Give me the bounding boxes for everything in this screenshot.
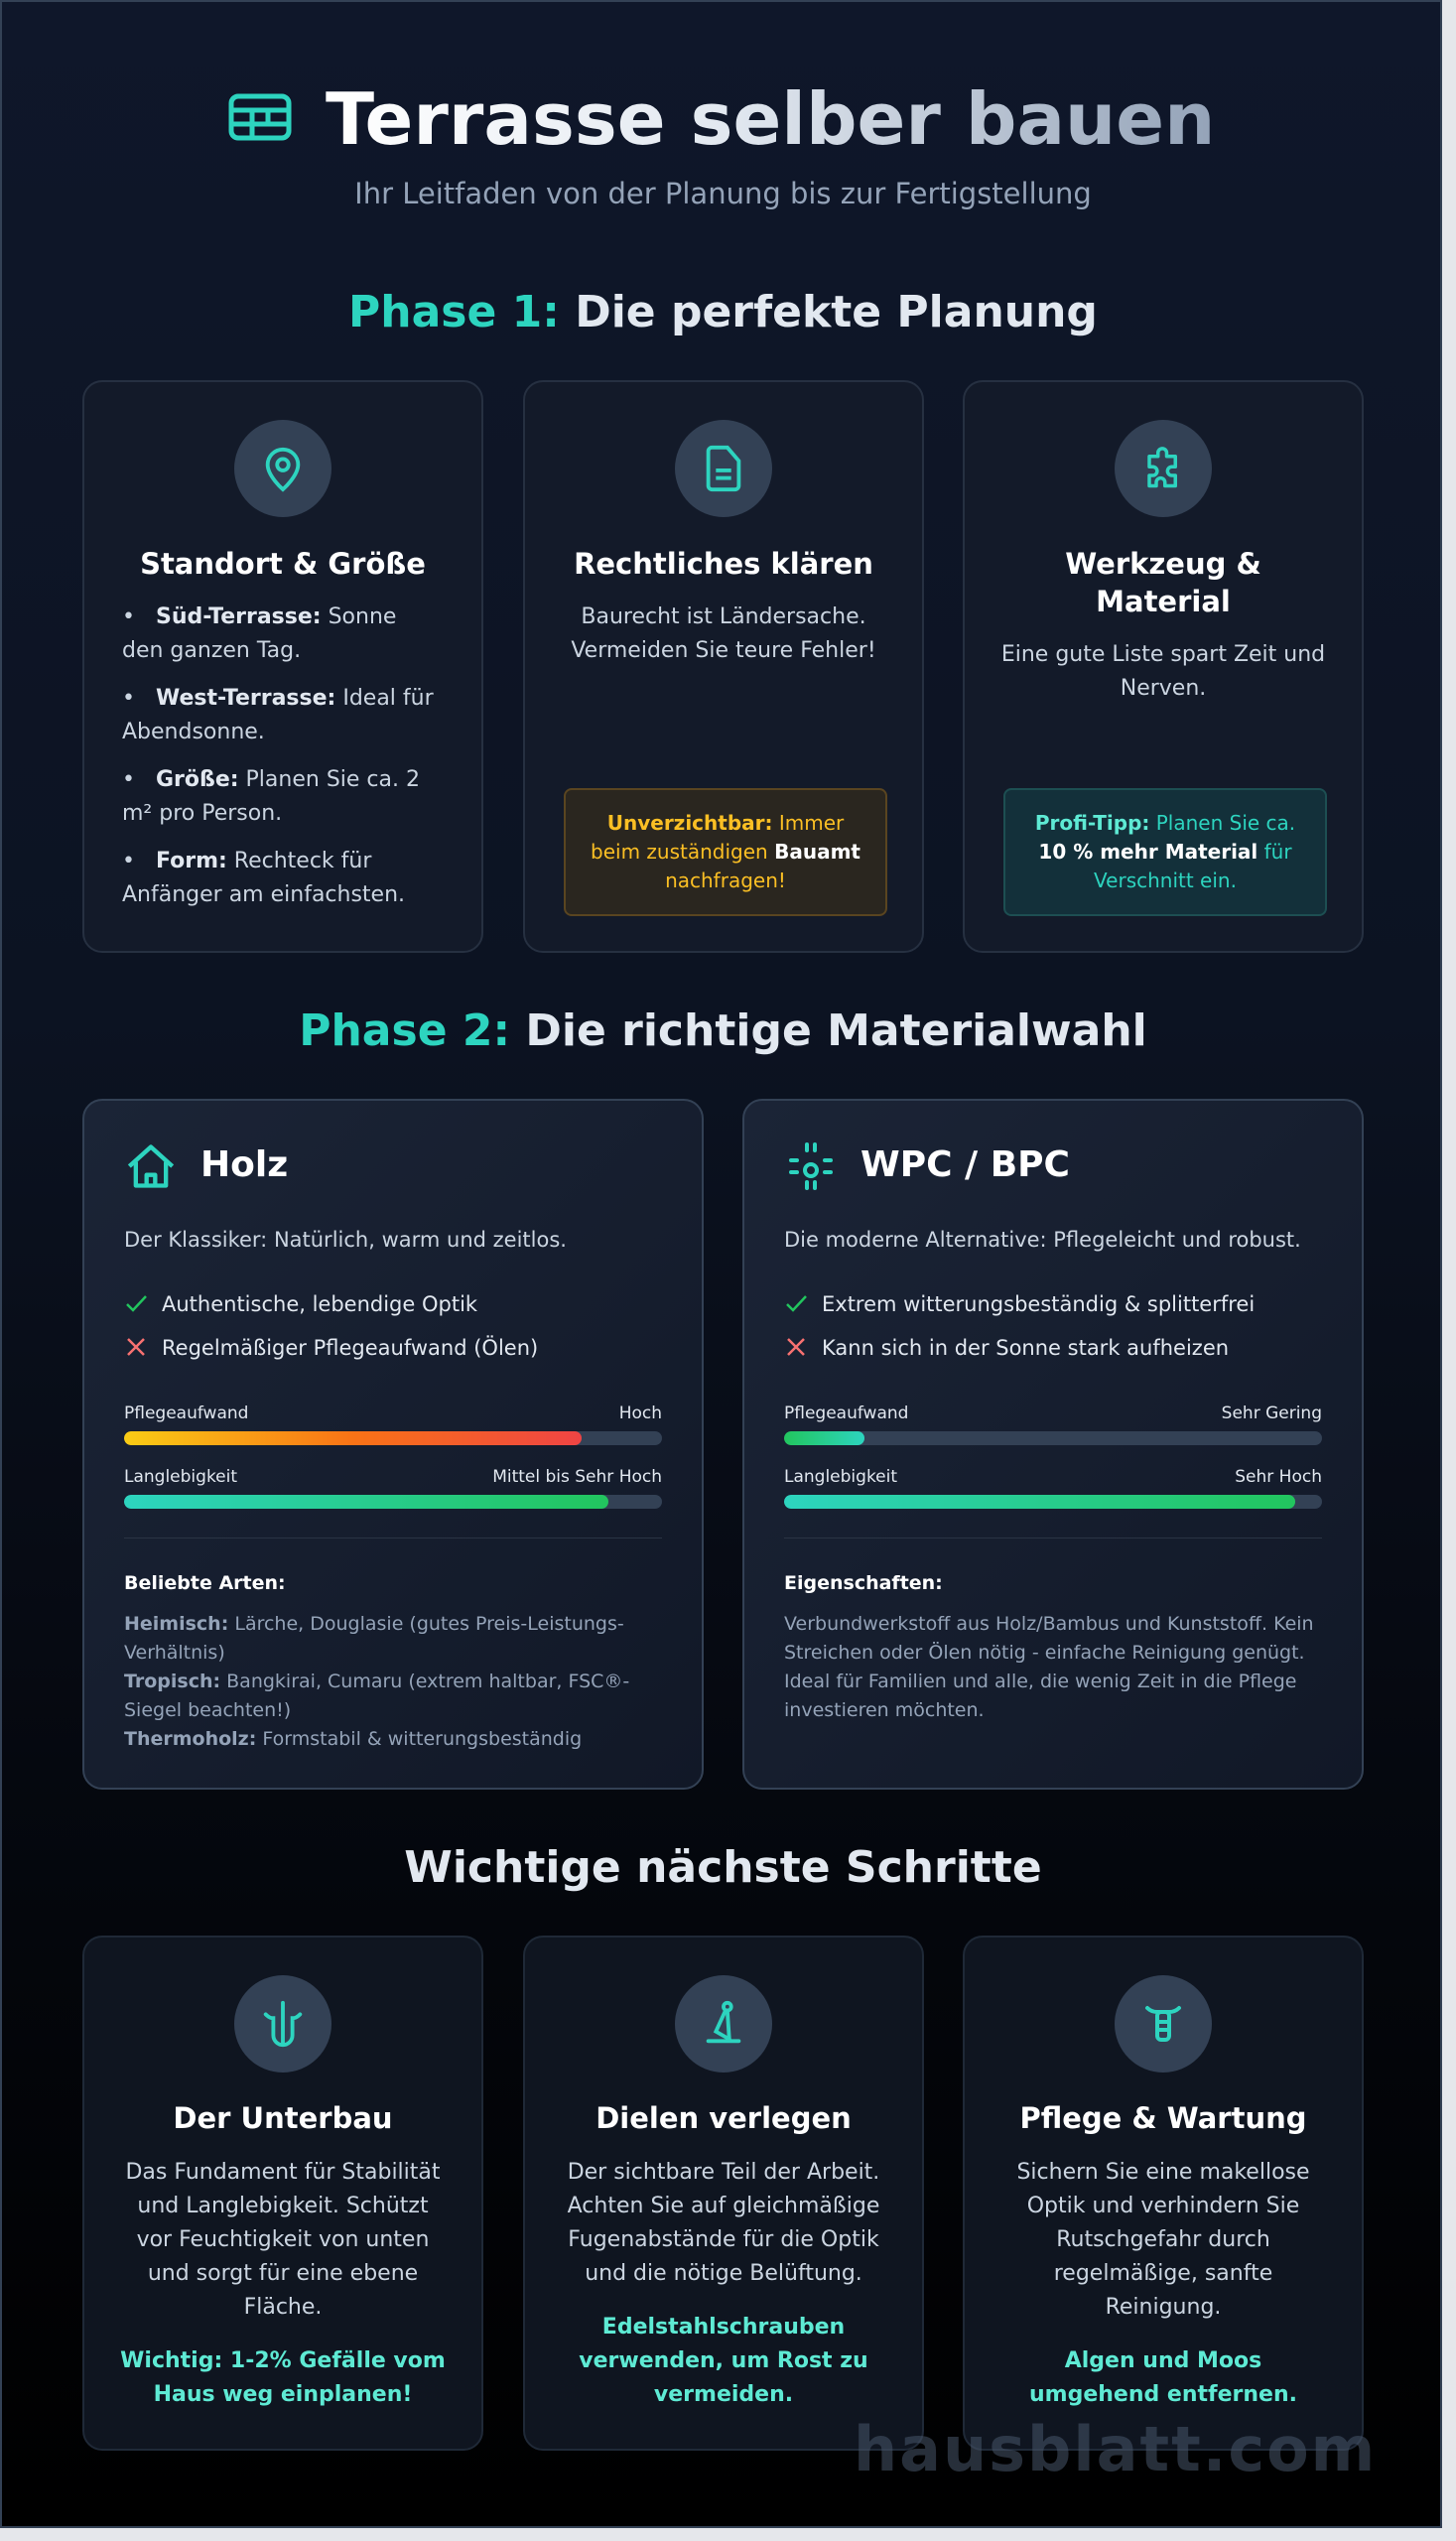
bar: Langlebigkeit: Sehr Hoch [1235, 1467, 1322, 1487]
bullet list: • Größe: Planen Sie ca. 2 m² pro Person. [122, 767, 420, 826]
text: Das Fundament für Stabilität und Langlebigkeit. Schützt vor Feuchtigkeit von unten und sorgt für eine ebene Fläche. [125, 2160, 441, 2320]
bar: Pflegeaufwand: Sehr Gering [1222, 1404, 1322, 1423]
bullet list [122, 604, 434, 907]
bar: Pflegeaufwand: Pflegeaufwand [784, 1404, 908, 1423]
card title: Rechtliches klären [574, 547, 873, 581]
bullet list: • Süd-Terrasse: Sonne den ganzen Tag. [122, 604, 396, 663]
heading: next steps: Wichtige nächste Schritte [404, 1842, 1042, 1893]
bar: Pflegeaufwand [784, 1404, 1322, 1423]
text: Eine gute Liste spart Zeit und Nerven. [1001, 642, 1325, 701]
icon: terrace grid [228, 93, 292, 141]
card title: Dielen verlegen [596, 2101, 852, 2135]
text: Sichern Sie eine makellose Optik und verhindern Sie Rutschgefahr durch regelmäßige, sanfte Reinigung. [1016, 2160, 1310, 2320]
text block: types: Beliebte Arten: [124, 1572, 286, 1594]
text block: types: Heimisch: Lärche, Douglasie (gutes Preis-Leistungs-Verhältnis) [124, 1613, 624, 1664]
callout: tip: Profi-Tipp: Planen Sie ca. 10 % mehr Material für Verschnitt ein. [1035, 811, 1295, 892]
panel: Dielen verlegen [523, 1936, 924, 2451]
panel: WPC / BPC [742, 1099, 1364, 1790]
heading: phase 1: Phase 1: Die perfekte Planung [348, 287, 1098, 337]
icon: puzzle [1115, 420, 1212, 517]
panel: Werkzeug & Material [963, 380, 1364, 953]
header [228, 77, 1215, 210]
pro con list: Kann sich in der Sonne stark aufheizen [822, 1336, 1229, 1360]
text block: types: Tropisch: Bangkirai, Cumaru (extrem haltbar, FSC®-Siegel beachten!) [124, 1671, 629, 1721]
icon: location pin [234, 420, 331, 517]
bar: Langlebigkeit: Langlebigkeit [124, 1467, 237, 1487]
icon: tool [675, 1975, 772, 2073]
card title: Der Unterbau [173, 2101, 393, 2135]
icon: house [128, 1144, 174, 1188]
bar: Langlebigkeit [784, 1467, 1322, 1487]
card title: Material [1096, 585, 1231, 618]
bar: Pflegeaufwand [124, 1404, 662, 1423]
card title [1065, 547, 1261, 618]
panel: Standort & Größe [82, 380, 483, 953]
material title: WPC / BPC [860, 1144, 1070, 1185]
pro con list [126, 1292, 538, 1360]
title: Terrasse selber bauen [326, 77, 1215, 161]
bar: Langlebigkeit: Langlebigkeit [784, 1467, 897, 1487]
callout text: Wichtig: 1-2% Gefälle vom Haus weg einplanen! [120, 2348, 446, 2407]
callout: warning [564, 788, 887, 916]
bullet list: • Form: Rechteck für Anfänger am einfachsten. [122, 849, 405, 907]
pro con list: Regelmäßiger Pflegeaufwand (Ölen) [162, 1336, 538, 1360]
bar: Pflegeaufwand: Pflegeaufwand [124, 1404, 248, 1423]
panel: Holz [82, 1099, 704, 1790]
subtitle: Ihr Leitfaden von der Planung bis zur Fertigstellung [354, 177, 1092, 210]
bar: Langlebigkeit [124, 1467, 662, 1487]
card title: Standort & Größe [140, 547, 426, 581]
text: Baurecht ist Ländersache. Vermeiden Sie teure Fehler! [571, 604, 876, 663]
watermark: hausblatt.com [854, 2413, 1377, 2485]
icon: foundation [234, 1975, 331, 2073]
callout: warning: Unverzichtbar: Immer beim zuständigen Bauamt nachfragen! [591, 811, 860, 892]
panel: Der Unterbau [82, 1936, 483, 2451]
callout text: Algen und Moos umgehend entfernen. [1029, 2348, 1297, 2407]
panel: Pflege & Wartung [963, 1936, 1364, 2451]
text block: types: Thermoholz: Formstabil & witterungsbeständig [124, 1728, 582, 1750]
text block: properties: Eigenschaften: [784, 1572, 943, 1594]
text block: properties: Verbundwerkstoff aus Holz/Bambus und Kunststoff. Kein Streichen oder Ölen nötig - einfache Reinigung genügt. Ideal für Familien und alle, die wenig Zeit in die Pflege investieren möchten. [784, 1613, 1314, 1721]
bar: Langlebigkeit: Mittel bis Sehr Hoch [492, 1467, 662, 1487]
heading: phase 2: Phase 2: Die richtige Materialwahl [299, 1005, 1147, 1056]
callout text: Edelstahlschrauben verwenden, um Rost zu vermeiden. [579, 2315, 868, 2407]
description: Die moderne Alternative: Pflegeleicht und robust. [784, 1228, 1301, 1252]
material title: Holz [200, 1144, 288, 1185]
icon: cleaning [1115, 1975, 1212, 2073]
pro con list [786, 1292, 1255, 1360]
bullet list: • West-Terrasse: Ideal für Abendsonne. [122, 686, 434, 744]
bar: Pflegeaufwand: Hoch [619, 1404, 662, 1423]
description: Der Klassiker: Natürlich, warm und zeitlos. [124, 1228, 567, 1252]
icon: composite [789, 1142, 833, 1190]
panel: Rechtliches klären [523, 380, 924, 953]
callout: tip [1003, 788, 1327, 916]
icon: document [675, 420, 772, 517]
card title: Werkzeug & [1065, 547, 1261, 581]
text block: types [124, 1572, 629, 1750]
text: Der sichtbare Teil der Arbeit. Achten Sie auf gleichmäßige Fugenabstände für die Optik und die nötige Belüftung. [568, 2160, 879, 2286]
card title: Pflege & Wartung [1019, 2101, 1307, 2135]
pro con list: Extrem witterungsbeständig & splitterfrei [822, 1292, 1255, 1316]
pro con list: Authentische, lebendige Optik [162, 1292, 477, 1316]
